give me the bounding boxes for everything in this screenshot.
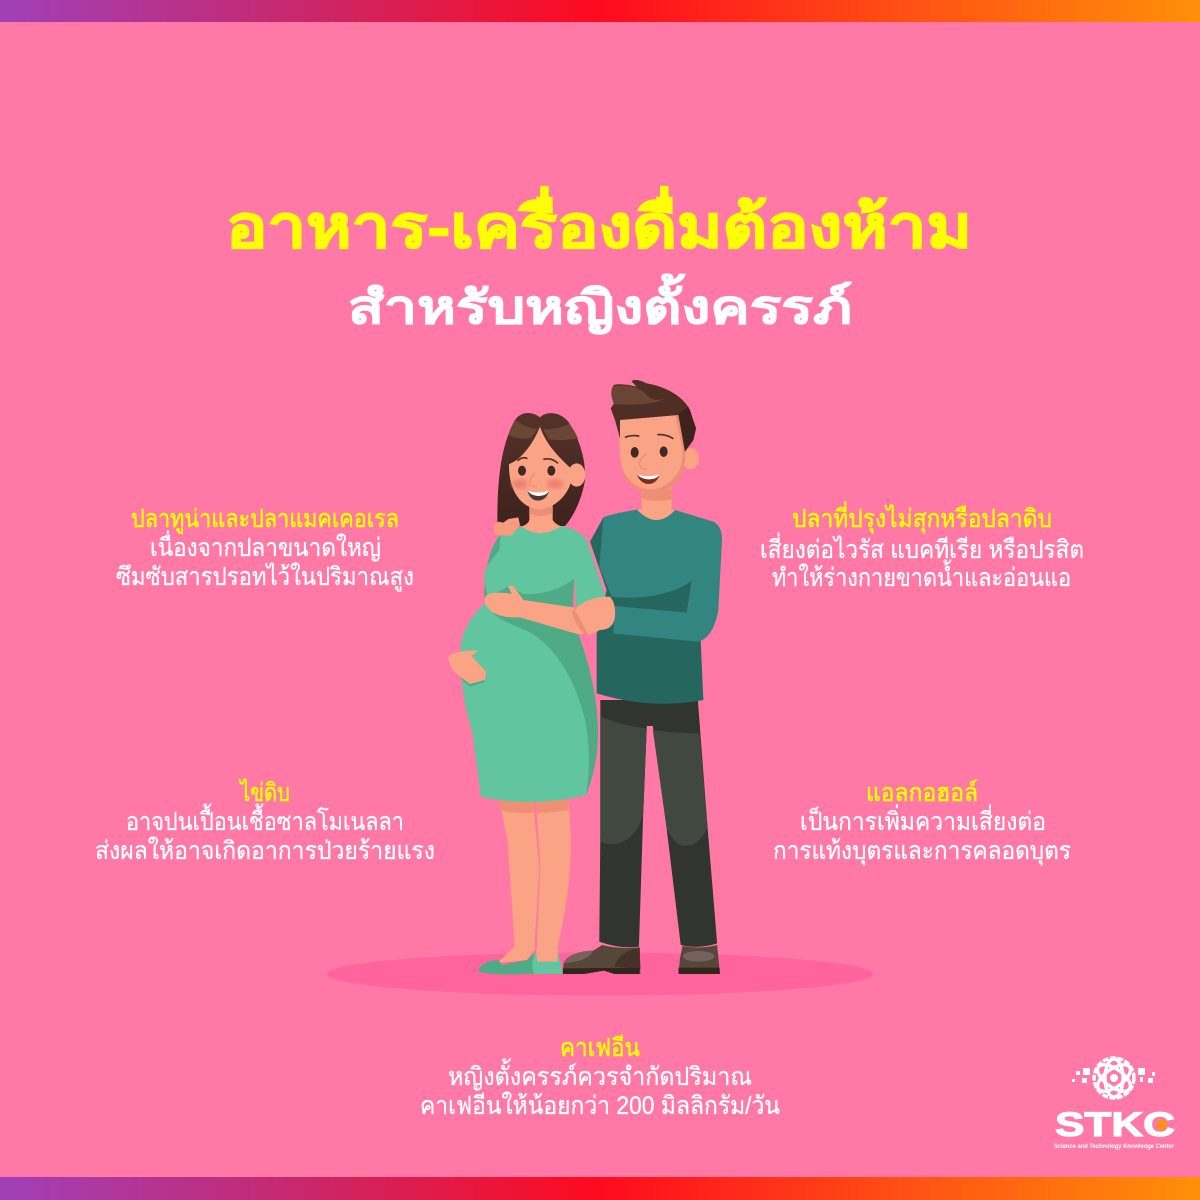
- ground shadow: [327, 952, 873, 996]
- text block: raw egg: อาจปนเปื้อนเชื้อซาลโมเนลลา: [126, 803, 404, 836]
- text block: raw egg: ส่งผลให้อาจเกิดอาการป่วยร้ายแรง: [95, 836, 435, 865]
- text block: caffeine: คาเฟอีนให้น้อยกว่า 200 มิลลิกรัม/วัน: [420, 1091, 780, 1120]
- text block: raw fish: เสี่ยงต่อไวรัส แบคทีเรีย หรือปรสิต: [760, 532, 1084, 564]
- woman legs and shoes: [478, 800, 571, 975]
- woman hand on shoulder: [493, 517, 520, 536]
- title: อาหาร-เครื่องดื่มต้องห้าม: [226, 186, 972, 260]
- illustration: couple: [448, 380, 722, 975]
- text block: raw fish: [760, 501, 1084, 592]
- woman lower hand shadow: [460, 678, 485, 687]
- text block: alcohol: เป็นการเพิ่มความเสี่ยงต่อ: [800, 804, 1046, 836]
- text block: caffeine: หญิงตั้งครรภ์ควรจำกัดปริมาณ: [448, 1058, 752, 1091]
- bottom gradient bar: [0, 1177, 1200, 1200]
- woman forearm: [485, 585, 587, 634]
- title: [226, 186, 972, 334]
- text block: alcohol: การแท้งบุตรและการคลอดบุตร: [773, 837, 1071, 866]
- text block: raw egg: [95, 778, 435, 865]
- arms and hands: [448, 517, 615, 687]
- woman dress: [460, 526, 606, 802]
- man torso and arm: [590, 509, 722, 704]
- woman hair back: [497, 413, 585, 526]
- top gradient bar: [0, 0, 1200, 22]
- text block: raw fish: ปลาที่ปรุงไม่สุกหรือปลาดิบ: [792, 501, 1052, 534]
- logo: STKC: Science and Technology Knowledge Center: [1054, 1144, 1175, 1150]
- woman head and neck: [509, 427, 585, 538]
- man hand: [572, 597, 615, 635]
- logo wordmark: STKC: [1055, 1106, 1175, 1144]
- logo: STKC: [1054, 1058, 1175, 1150]
- title: สำหรับหญิงตั้งครรภ์: [348, 273, 852, 334]
- text block: tuna and mackerel: ซึมซับสารปรอทไว้ในปริมาณสูง: [116, 562, 414, 592]
- text block: caffeine: [420, 1034, 780, 1120]
- man head and neck: [611, 380, 699, 520]
- man legs and shoes: [563, 700, 720, 974]
- text block: tuna and mackerel: ปลาทูน่าและปลาแมคเคอเรล: [131, 505, 399, 534]
- text block: alcohol: [773, 779, 1071, 866]
- text block: caffeine: คาเฟอีน: [560, 1034, 640, 1062]
- text block: tuna and mackerel: เนื่องจากปลาขนาดใหญ่: [150, 530, 381, 562]
- woman lower hand: [448, 651, 486, 684]
- logo icon: [1072, 1058, 1155, 1098]
- text block: alcohol: แอลกอฮอล์: [866, 779, 978, 807]
- text block: raw egg: ไข่ดิบ: [238, 778, 290, 807]
- text block: tuna and mackerel: [116, 505, 414, 592]
- text block: raw fish: ทำให้ร่างกายขาดน้ำและอ่อนแอ: [772, 559, 1071, 592]
